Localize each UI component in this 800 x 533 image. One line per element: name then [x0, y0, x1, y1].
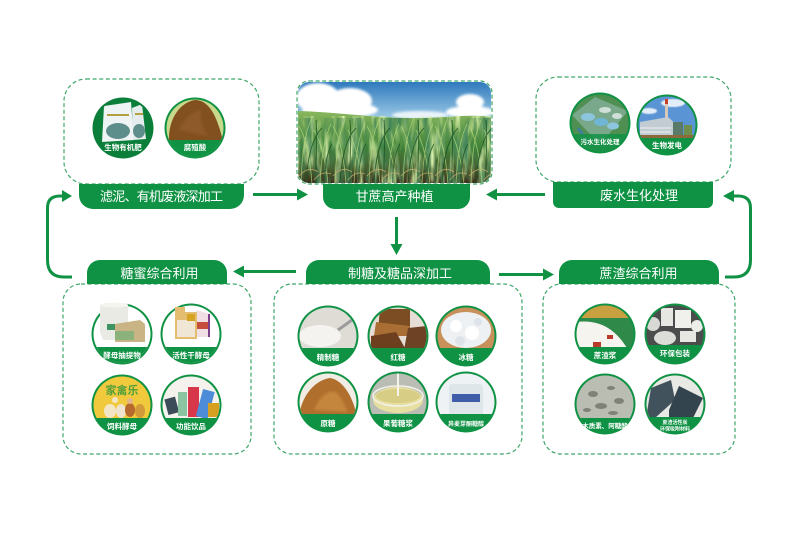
icon: fructose syrup: 果葡糖浆	[383, 418, 413, 428]
heading: sugarcane planting	[323, 184, 470, 209]
heading: filter mud	[79, 184, 244, 209]
icon: sewage treatment	[570, 92, 630, 154]
arrow: wastewater to planting	[486, 188, 545, 200]
icon: functional drinks: 功能饮品	[176, 421, 206, 431]
icon: active dry yeast	[160, 304, 222, 364]
icon: brown sugar: 红糖	[390, 352, 406, 362]
icon: bagasse activated carbon: 蔗渣活性炭	[662, 419, 688, 426]
icon: bagasse pulp: 蔗渣浆	[594, 350, 617, 360]
icon: biomass power generation	[636, 94, 698, 156]
heading: filter mud: 滤泥、有机废液深加工	[100, 189, 223, 204]
icon: bagasse activated carbon: 环保吸附材料	[660, 426, 690, 432]
icon: sewage treatment: 污水生化处理	[580, 137, 620, 146]
heading: sugar making: 制糖及糖品深加工	[348, 266, 452, 281]
icon: rock sugar: 冰糖	[458, 352, 474, 362]
icon: eco packaging: 环保包装	[660, 348, 690, 358]
panel: molasses utilization	[63, 260, 251, 454]
icon: biomass power generation: 生物发电	[652, 140, 682, 150]
icon: humic acid: 腐殖酸	[184, 142, 207, 152]
image: sugarcane field under blue sky	[296, 82, 494, 184]
icon: bio-organic fertilizer	[92, 98, 154, 158]
icon: yeast extract: 酵母抽提物	[103, 350, 141, 360]
arrow: molasses loop to filter mud	[48, 190, 72, 277]
icon: bagasse activated carbon	[644, 374, 706, 434]
icon: rock sugar	[436, 306, 496, 366]
icon: brown sugar	[368, 306, 428, 366]
icon: raw sugar: 原糖	[320, 418, 336, 428]
icon: fructose syrup	[368, 372, 428, 432]
icon: feed yeast	[92, 374, 152, 436]
icon: bagasse pulp	[574, 304, 636, 364]
icon: feed yeast: 饲料酵母	[107, 421, 137, 431]
panel: wastewater biochemical treatment	[536, 77, 731, 208]
arrow: bagasse loop to wastewater	[723, 190, 750, 277]
icon: functional drinks	[160, 374, 222, 436]
icon: feed yeast: 家禽乐	[106, 383, 138, 397]
icon: raw sugar	[298, 372, 358, 432]
arrow: sugar making to bagasse	[499, 268, 554, 280]
icon: eco packaging	[644, 304, 706, 364]
heading: sugarcane planting: 甘蔗高产种植	[355, 189, 434, 204]
icon: lignin and arabinose	[574, 374, 636, 434]
heading: wastewater treatment	[553, 182, 713, 208]
icon: humic acid	[164, 98, 226, 158]
arrow: sugar making to molasses	[233, 266, 296, 278]
heading: molasses: 糖蜜综合利用	[120, 266, 199, 281]
heading: sugar making	[306, 260, 490, 284]
icon: active dry yeast: 活性干酵母	[172, 350, 210, 360]
heading: molasses	[87, 260, 227, 284]
icon: isomaltulose: 异麦芽酮糖醇	[448, 420, 484, 428]
arrow: filter mud to planting	[253, 188, 308, 200]
icon: refined sugar	[298, 306, 358, 366]
icon: lignin and arabinose: 木质素、阿糖酸	[582, 421, 628, 430]
panel: sugar making and deep processing	[274, 260, 522, 454]
panel: sugarcane planting	[296, 81, 494, 209]
heading: wastewater treatment: 废水生化处理	[600, 188, 678, 203]
panel: bagasse utilization	[543, 260, 735, 454]
arrow: planting to sugar making	[390, 217, 402, 255]
icon: yeast extract	[92, 302, 152, 364]
icon: bio-organic fertilizer: 生物有机肥	[104, 142, 142, 152]
icon: refined sugar: 精制糖	[317, 352, 340, 362]
icon: isomaltulose	[436, 372, 496, 432]
heading: bagasse: 蔗渣综合利用	[599, 266, 678, 281]
heading: bagasse	[559, 260, 719, 284]
panel: filter mud and organic waste liquid processing	[64, 79, 259, 209]
